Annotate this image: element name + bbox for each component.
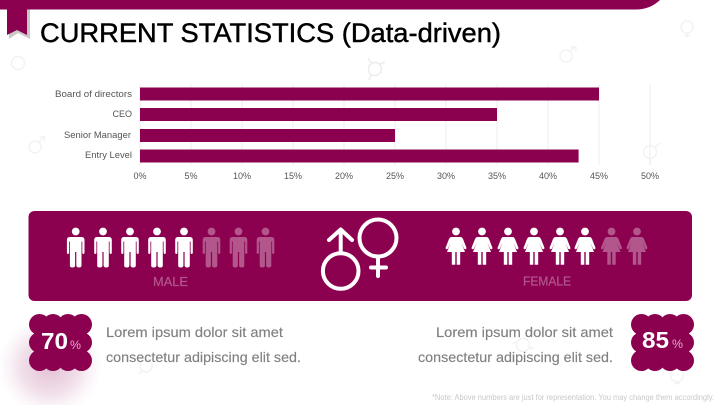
axis labels: 15%: [284, 171, 302, 181]
bar: CEO: [140, 108, 497, 121]
text block: female description: consectetur adipiscing elit sed.: [418, 349, 613, 365]
category labels: Entry Level: [85, 150, 132, 160]
decorative pink glow: [0, 316, 102, 405]
bar: board of directors: [140, 88, 599, 100]
axis labels: 30%: [437, 171, 455, 181]
axis labels: [133, 171, 659, 181]
bar chart: [55, 84, 659, 181]
text block: female description: Lorem ipsum dolor sit amet: [436, 324, 613, 340]
category labels: Board of directors: [55, 89, 133, 99]
category labels: Senior Manager: [64, 130, 131, 140]
axis labels: 25%: [386, 171, 404, 181]
axis labels: 0%: [133, 171, 147, 181]
text block: male description: [106, 324, 301, 365]
female label: FEMALE: [523, 274, 571, 288]
axis labels: 45%: [590, 171, 608, 181]
axis labels: 40%: [539, 171, 557, 181]
bar: senior manager: [140, 129, 395, 142]
bar: entry level: [140, 150, 579, 162]
callout: male percentage: %: [70, 338, 81, 352]
axis labels: 20%: [335, 171, 353, 181]
callout: female percentage: 85: [642, 327, 669, 353]
category labels: CEO: [112, 109, 132, 119]
axis labels: 10%: [233, 171, 251, 181]
callout: male percentage: [29, 314, 92, 371]
callout: male percentage: 70: [41, 328, 68, 354]
panel: male and female pictograms: [28, 211, 692, 301]
title: CURRENT STATISTICS (Data-driven): [40, 18, 501, 48]
icon: bookmark ribbon: [7, 0, 30, 39]
axis labels: 35%: [488, 171, 506, 181]
axis labels: 5%: [184, 171, 198, 181]
callout: female percentage: [631, 314, 694, 371]
text block: male description: consectetur adipiscing elit sed.: [106, 349, 301, 365]
male pictogram row: [67, 228, 274, 268]
axis labels: 50%: [641, 171, 659, 181]
male label: MALE: [153, 274, 188, 289]
top banner bar: [0, 0, 660, 10]
callout: female percentage: %: [672, 337, 683, 351]
female pictogram row: [446, 228, 647, 265]
category labels: [55, 89, 133, 160]
text block: female description: [418, 324, 613, 365]
icon: male and female symbols: [323, 220, 396, 289]
text block: male description: Lorem ipsum dolor sit amet: [106, 324, 283, 340]
